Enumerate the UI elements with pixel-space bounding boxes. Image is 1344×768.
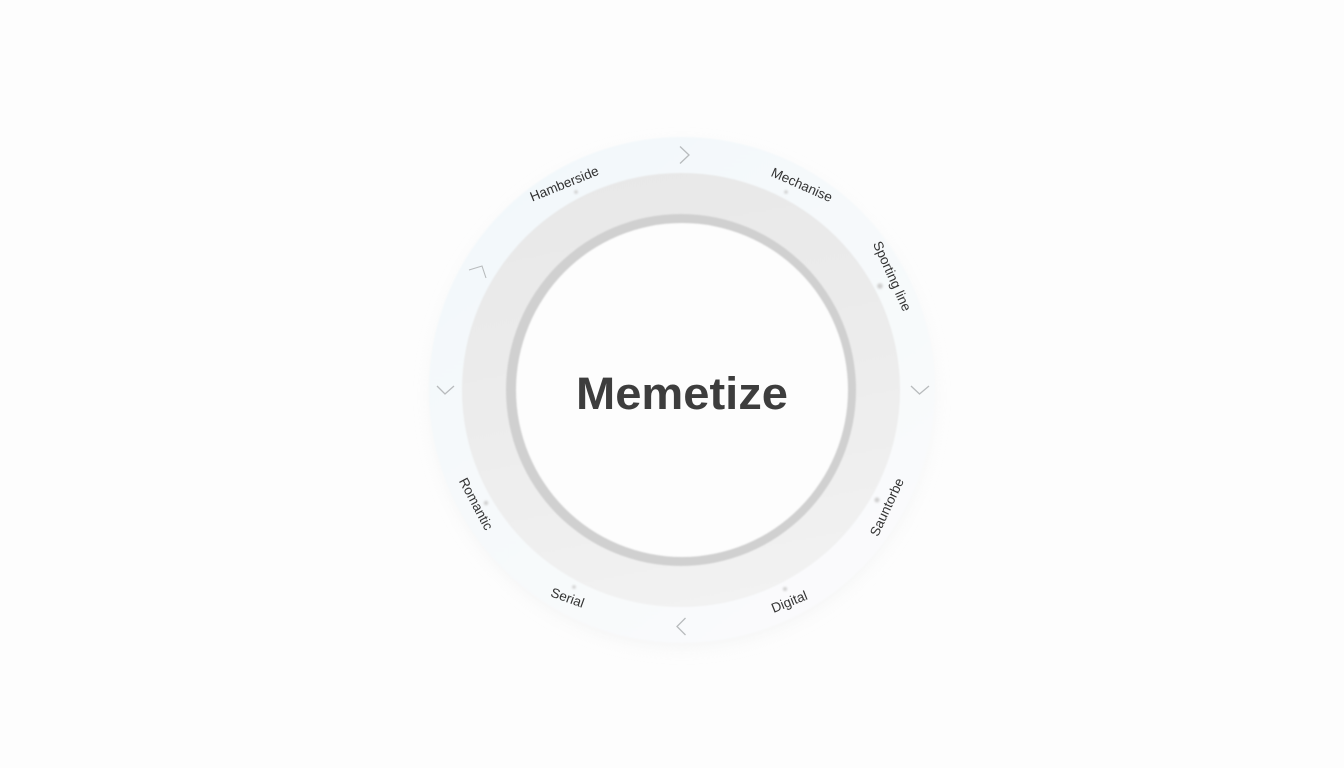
label: Sporting: Sporting line — [870, 239, 914, 314]
label: Romantic: Romantic — [456, 475, 496, 533]
inner ring band — [506, 214, 856, 566]
label: Serial: Serial — [549, 585, 586, 611]
icon: chevron right — [911, 386, 929, 394]
label: Hamberside: Hamberside — [528, 163, 601, 204]
icon: chevron upper left — [469, 266, 486, 278]
label: Digital: Digital — [769, 588, 810, 616]
icon: chevron left — [437, 386, 454, 394]
icon: chevron bottom — [677, 618, 686, 635]
outer ring shadow — [431, 145, 933, 647]
center disc — [516, 223, 848, 557]
center title: Memetize — [576, 368, 788, 419]
circular diagram — [429, 137, 935, 647]
marker dots — [484, 190, 883, 591]
outer ring — [429, 137, 935, 643]
middle ring — [462, 173, 900, 607]
label: Mechanise: Mechanise — [769, 165, 835, 205]
icon: chevron top — [680, 146, 689, 164]
label: Sauntorbe: Sauntorbe — [867, 476, 907, 539]
